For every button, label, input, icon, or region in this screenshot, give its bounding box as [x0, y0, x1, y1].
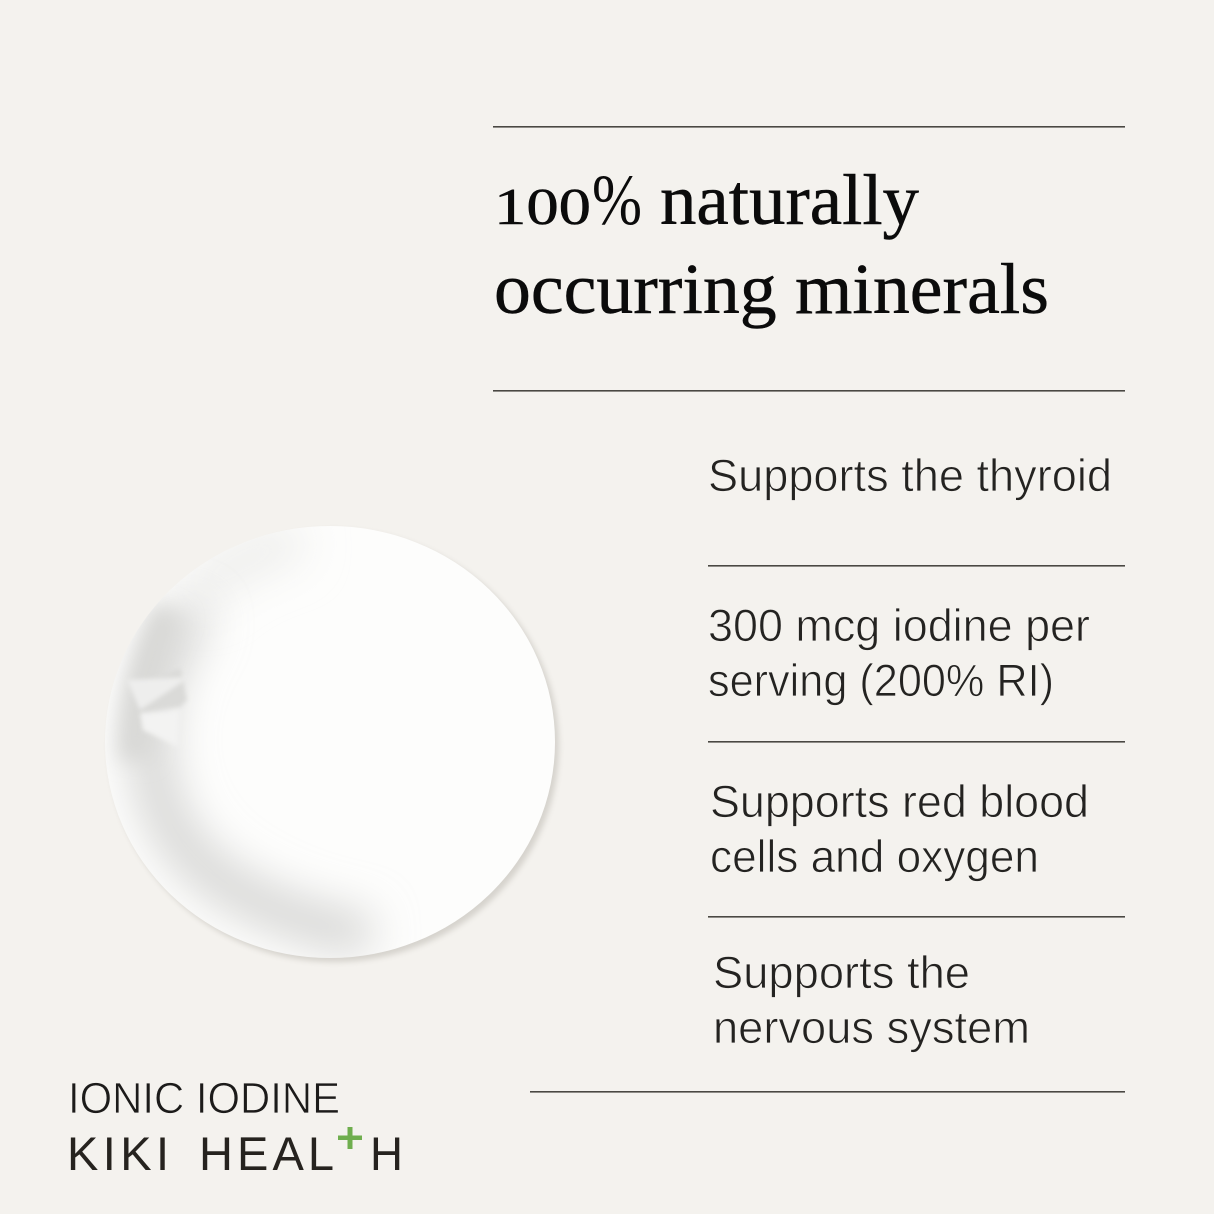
logo: Kiki Health: KIKI: [67, 1127, 169, 1180]
infographic canvas: [70, 126, 1125, 1170]
benefit: red blood cells: cells and oxygen: [710, 831, 1039, 882]
logo: Kiki Health: H: [370, 1127, 403, 1180]
divider two: [708, 741, 1125, 743]
benefit: iodine per serving: [708, 600, 1090, 706]
logo: Kiki Health: [67, 1127, 403, 1180]
product name: IONIC IODINE: [68, 1074, 340, 1123]
heading: [494, 160, 1049, 329]
top divider: [493, 126, 1125, 128]
benefit: thyroid: Supports the thyroid: [708, 450, 1112, 501]
icon: white mineral tablet: [105, 526, 559, 962]
benefit: nervous system: [713, 947, 1030, 1053]
benefit: nervous system: nervous system: [713, 1002, 1030, 1053]
divider three: [708, 916, 1125, 918]
benefit: iodine per serving: 300 mcg iodine per: [708, 600, 1090, 651]
heading: 100: [494, 179, 591, 236]
logo: Kiki Health: HEAL: [199, 1127, 334, 1180]
heading: naturally: [660, 160, 919, 240]
benefit: nervous system: Supports the: [713, 947, 970, 998]
heading bottom divider: [493, 390, 1125, 392]
benefit: red blood cells: Supports red blood: [710, 776, 1089, 827]
icon: green plus standing in for the T: [338, 1127, 362, 1149]
heading: %: [592, 160, 642, 240]
bottom divider: [530, 1091, 1125, 1093]
heading: occurring minerals: [494, 249, 1049, 329]
divider one: [708, 565, 1125, 567]
benefit: iodine per serving: serving (200% RI): [708, 655, 1054, 706]
benefit: red blood cells: [710, 776, 1089, 882]
